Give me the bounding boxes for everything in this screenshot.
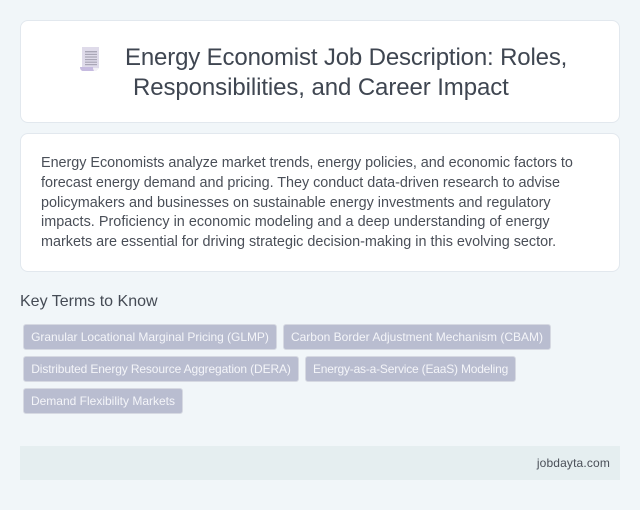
footer source text: jobdayta.com (537, 456, 610, 470)
chip: DERA: Distributed Energy Resource Aggregation (DERA) (31, 362, 291, 376)
description text: impacts. Proficiency in economic modeling and a deep understanding of energy (41, 214, 550, 230)
chip: CBAM: Carbon Border Adjustment Mechanism (CBAM) (291, 330, 543, 344)
chip: GLMP: Granular Locational Marginal Pricing (GLMP) (31, 330, 269, 344)
chip: demand flexibility (23, 388, 183, 414)
description text: forecast energy demand and pricing. They conduct data-driven research to advise (41, 175, 560, 191)
title (125, 44, 567, 101)
description text: Energy Economists analyze market trends, energy policies, and economic factors to (41, 155, 573, 171)
heading: key terms: Key Terms to Know (20, 293, 158, 310)
term chips (23, 324, 551, 414)
chip: EaaS: Energy-as-a-Service (EaaS) Modeling (313, 362, 508, 376)
chip: EaaS (305, 356, 516, 382)
icon: document scroll (80, 47, 99, 71)
title: Responsibilities, and Career Impact (133, 74, 509, 101)
chip: DERA (23, 356, 299, 382)
chip: demand flexibility: Demand Flexibility Markets (31, 394, 175, 408)
description text (41, 155, 573, 250)
description text: markets are essential for driving strategic decision-making in this evolving sector. (41, 234, 556, 250)
title: Energy Economist Job Description: Roles, (125, 44, 567, 71)
chip: GLMP (23, 324, 277, 350)
panel: title card (20, 20, 620, 123)
panel: description card (20, 133, 620, 272)
description text: policymakers and businesses on sustainable energy investments and regulatory (41, 195, 551, 211)
footer bar (20, 446, 620, 480)
chip: CBAM (283, 324, 551, 350)
